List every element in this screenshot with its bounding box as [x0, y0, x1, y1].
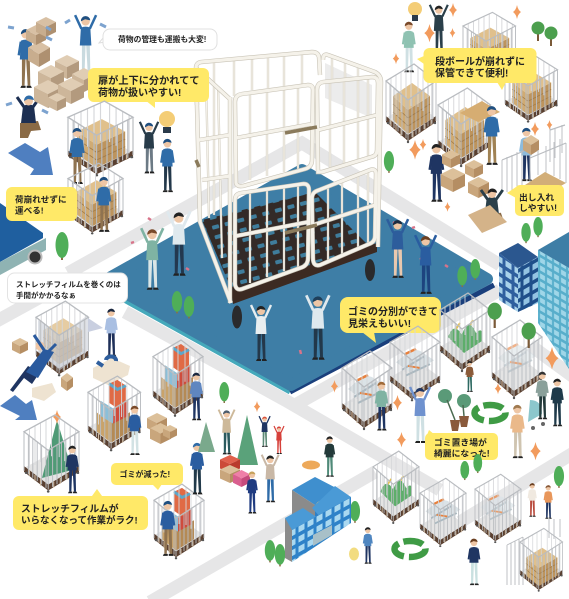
- main roll cage: [196, 52, 381, 328]
- open cage with boxes: [507, 518, 563, 592]
- bubble: carry: 荷崩れせずに: [15, 194, 67, 204]
- pile of boxes: [34, 55, 96, 111]
- trees by school: [265, 501, 360, 566]
- worker: [129, 406, 140, 455]
- bubble: white film: ストレッチフィルムを巻くのは: [16, 279, 121, 289]
- blue platform: [97, 170, 494, 392]
- gift cage upper: [153, 340, 203, 420]
- cage bottles: [475, 474, 521, 543]
- star: [53, 410, 61, 424]
- runner: [325, 436, 334, 477]
- cage trash: [420, 478, 466, 547]
- bubble: sorting trash: 見栄えもいい!: [348, 317, 411, 330]
- stacked boxes: [147, 413, 177, 444]
- cage top: [463, 12, 516, 76]
- yellow bag: [349, 548, 359, 560]
- woman navy dress: [247, 471, 257, 514]
- film rolls in box: [97, 356, 116, 366]
- entrance: [313, 525, 332, 546]
- man arms up: [430, 5, 448, 55]
- bubble: doors: 扉が上下に分かれてて: [98, 74, 200, 87]
- worker: [67, 446, 78, 493]
- bubble: carry: [6, 187, 77, 221]
- film sheet: [88, 318, 103, 332]
- tower: [292, 477, 340, 535]
- worker: [191, 373, 202, 420]
- school building: [285, 477, 351, 562]
- kneeling person: [17, 95, 41, 138]
- loose box center: [61, 373, 73, 391]
- person arms up: [262, 455, 279, 502]
- child blue: [259, 416, 270, 447]
- bubble: white film: [8, 273, 128, 303]
- tan gift: [220, 465, 240, 483]
- worker with lid: [485, 106, 498, 165]
- bubble: stored: 保管できて便利!: [435, 66, 508, 80]
- buildings: [499, 232, 569, 369]
- woman arms up: [140, 122, 158, 173]
- cage trash middle: [390, 326, 440, 401]
- side: [285, 518, 292, 562]
- man blue suit: [415, 235, 436, 294]
- arrow lower left: [0, 395, 37, 420]
- kneeling man: [481, 188, 504, 229]
- woman arms folded: [161, 139, 174, 192]
- bubble: doors: 荷物が扱いやすい!: [98, 86, 181, 99]
- cage right: [492, 320, 542, 399]
- boxes on the floor: [441, 150, 489, 198]
- man teal shirt: [403, 22, 415, 72]
- bubble: no film: ストレッチフィルムが: [21, 502, 119, 515]
- bubble: no film: いらなくなって作業がラク!: [21, 514, 138, 526]
- latches: [196, 127, 317, 233]
- woman with bottle: [469, 539, 479, 585]
- recycling mark: [474, 405, 506, 421]
- two women and bulb: [140, 111, 175, 192]
- recycling area bottom cages: [349, 451, 563, 592]
- cheering person: [306, 295, 329, 360]
- top-right group: [384, 2, 566, 243]
- woman with ponytail: [376, 382, 387, 430]
- icon: light bulb: [408, 2, 422, 21]
- worker pushing: [97, 177, 110, 232]
- cage right tall: [505, 55, 558, 123]
- potted plants: [438, 389, 471, 431]
- left wing roof: [285, 508, 321, 532]
- celebration group: [191, 382, 284, 514]
- flat box: [468, 205, 507, 233]
- wall behind cage: [325, 63, 372, 118]
- recycling mark: [394, 541, 426, 557]
- front: [292, 497, 351, 562]
- cage bars: [206, 52, 368, 283]
- tree: [384, 151, 394, 173]
- trees: [532, 22, 558, 46]
- xmas tree: [236, 415, 258, 465]
- sweeping children: [528, 483, 552, 519]
- bubble: stored: [417, 48, 536, 90]
- woman navy: [387, 219, 408, 278]
- cage bars outline: [206, 52, 368, 283]
- worker pushing: [161, 501, 174, 556]
- carried box: [523, 135, 539, 155]
- bubble: easy in and out: 出し入れ: [519, 192, 554, 202]
- trees: [488, 303, 536, 348]
- opened box: [93, 358, 130, 385]
- people on platform: [141, 211, 480, 361]
- dog and runner: [302, 436, 334, 477]
- wrapping area: [10, 301, 130, 401]
- wheel right: [365, 259, 375, 281]
- worried person: [75, 15, 96, 74]
- trees right: [521, 217, 543, 243]
- bubble: no film: [13, 489, 148, 530]
- cage plants: [440, 293, 490, 372]
- child red: [274, 426, 284, 454]
- film cage: [36, 301, 89, 376]
- icon: light bulb: [159, 111, 175, 133]
- sparkles: [393, 3, 552, 212]
- cage with boxes upper left: [68, 101, 133, 184]
- sweat drops: [6, 20, 106, 113]
- bubble: less trash: [111, 463, 183, 490]
- woman with film: [106, 309, 117, 356]
- light blue building: [538, 232, 569, 369]
- dark blue building: [499, 243, 538, 312]
- person beige: [511, 405, 524, 458]
- tree: [219, 382, 229, 403]
- cage left: [386, 64, 436, 143]
- carried boxes: [26, 17, 56, 67]
- right wing roof: [312, 486, 351, 519]
- bubble: carry: 運べる!: [15, 206, 44, 216]
- jumping person: [251, 305, 271, 361]
- pallet: [202, 192, 370, 293]
- loose box left: [12, 338, 28, 354]
- pink gift: [233, 470, 250, 487]
- platform surface: [104, 170, 487, 385]
- open white box: [32, 383, 56, 401]
- person green shirt: [141, 228, 163, 290]
- gift cage center left: [88, 376, 141, 455]
- truck chassis: [0, 238, 46, 275]
- tree left: [56, 232, 68, 260]
- base underside: [231, 243, 377, 304]
- christmas tree cage: [24, 410, 79, 493]
- cage frame outline: [196, 52, 381, 303]
- cage plants: [373, 451, 419, 524]
- stroller: [528, 400, 545, 430]
- bubble: sorting trash: ゴミの分別ができて: [348, 305, 438, 318]
- bubble: white film: 手間がかかるなぁ: [16, 290, 76, 300]
- small xmas tree: [198, 422, 215, 452]
- cage being moved: [68, 163, 123, 234]
- man with box: [520, 128, 533, 181]
- person white shirt: [167, 211, 190, 276]
- worker: [70, 128, 84, 184]
- child arms out: [466, 361, 473, 392]
- cage center: [438, 88, 491, 167]
- bubble: cargo trouble: [99, 29, 217, 50]
- boy with bag: [364, 527, 372, 564]
- couple man: [537, 372, 548, 419]
- bubble: clean area: 綺麗になった!: [434, 448, 490, 458]
- truck body: [0, 203, 43, 262]
- trees on platform: [172, 259, 480, 318]
- cage frame: [196, 52, 381, 303]
- bubble: stored: 段ボールが崩れずに: [435, 55, 525, 68]
- woman beige vest: [219, 410, 235, 454]
- cage trash left: [342, 351, 392, 430]
- top-left group: [6, 15, 106, 138]
- couple woman: [552, 379, 563, 426]
- roads: [0, 143, 569, 599]
- trees under bubble: [460, 454, 564, 488]
- truck: [0, 203, 46, 275]
- wheel left: [232, 306, 242, 328]
- sparkles: [254, 401, 260, 412]
- man navy suit: [430, 144, 443, 202]
- gift cage bottom: [154, 484, 204, 559]
- gift boxes: [220, 455, 240, 473]
- bubble: easy in and out: しやすい!: [519, 203, 557, 213]
- platform edges: [97, 285, 290, 392]
- confetti: [131, 218, 448, 354]
- sparkles: [331, 347, 558, 460]
- person with tree: [191, 443, 203, 494]
- arrow upper left: [8, 143, 53, 175]
- man lunging: [10, 335, 56, 392]
- recycling area top cages: [331, 293, 563, 460]
- bubble: less trash: ゴミが減った!: [120, 469, 170, 479]
- woman jumping: [410, 387, 430, 443]
- man carrying boxes: [19, 29, 32, 88]
- dog: [302, 460, 320, 470]
- bubble: easy in and out: [507, 185, 564, 216]
- bubble: doors: [88, 68, 209, 108]
- flat box lifted: [460, 101, 500, 122]
- clock: [316, 501, 328, 513]
- bubble: clean area: ゴミ置き場が: [434, 436, 487, 448]
- bubble: sorting trash: [340, 297, 441, 343]
- platform dark edge: [290, 285, 494, 392]
- bubble: clean area: [425, 430, 498, 460]
- bubble: cargo trouble: 荷物の管理も運搬も大変!: [118, 34, 206, 44]
- christmas tree: [42, 420, 72, 478]
- open cage: [502, 125, 566, 195]
- truck wheel: [28, 250, 42, 264]
